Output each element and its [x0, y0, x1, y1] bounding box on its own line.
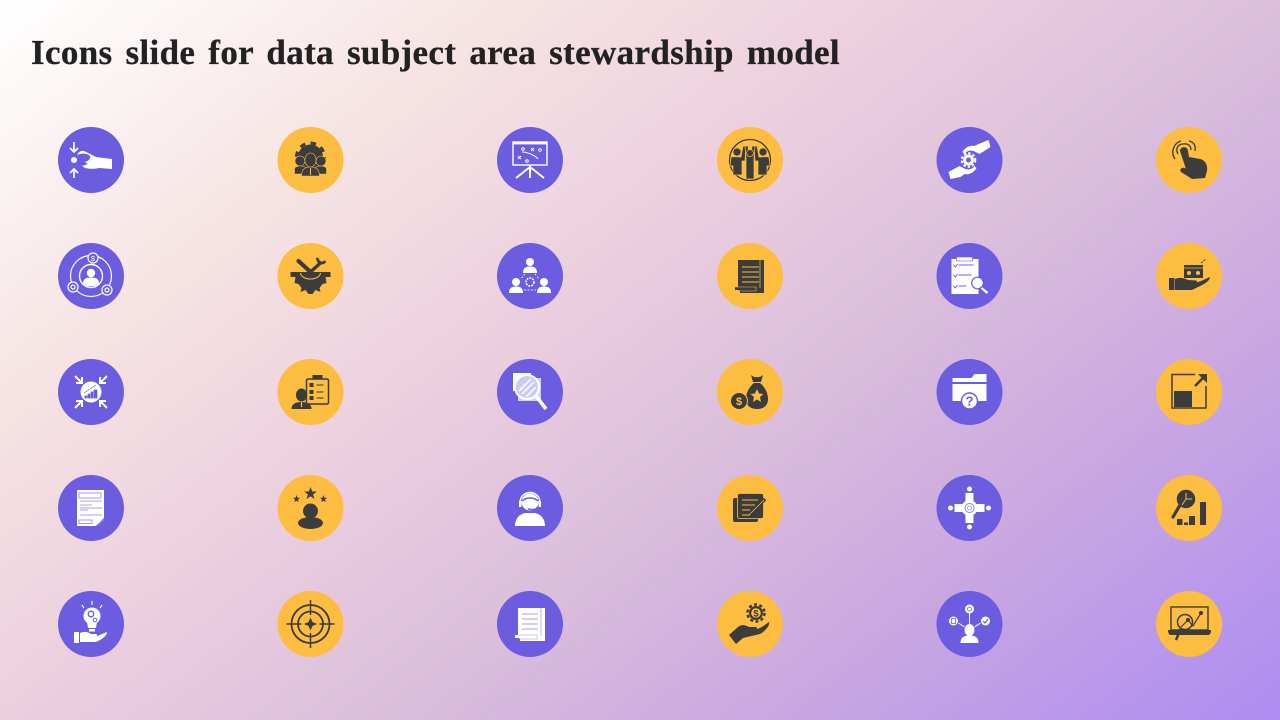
icon: hand holding dollar gear: $ — [753, 608, 759, 620]
icon: magnifier over hatched square — [497, 359, 563, 425]
icon: hand holding dollar gear — [717, 591, 783, 657]
icon: folder with question mark: ? — [966, 394, 974, 408]
icon: tools on half gear — [278, 243, 344, 309]
icon: three people around gear — [497, 243, 563, 309]
icon: dark scroll document — [717, 243, 783, 309]
icon: user in cycle of finance nodes — [58, 243, 124, 309]
icon: support agent with headset — [497, 475, 563, 541]
icon: target crosshair — [278, 591, 344, 657]
icon: person connected to three nodes — [936, 591, 1002, 657]
icon: businessman with checklist — [278, 359, 344, 425]
icon: money bag with coin: $ — [736, 396, 742, 408]
icon: finger tapping — [1156, 127, 1222, 193]
icon: money bag with coin — [717, 359, 783, 425]
icon: four people around table — [936, 475, 1002, 541]
icon: hand pinching with arrows — [58, 127, 124, 193]
icon: resize square with arrow — [1156, 359, 1222, 425]
icon: magnifier with pie and bar chart — [1156, 475, 1222, 541]
icon: person with three stars — [278, 475, 344, 541]
icon grid — [58, 127, 1222, 657]
icon: group celebrating in circle — [717, 127, 783, 193]
icon: white scroll document — [497, 591, 563, 657]
icon: laptop with analytics magnifier — [1156, 591, 1222, 657]
icon: user in cycle of finance nodes: $ — [91, 254, 96, 263]
icon: notes with pencil — [717, 475, 783, 541]
icon: strategy presentation board — [497, 127, 563, 193]
icon: folder with question mark — [936, 359, 1002, 425]
icon: hand holding cash — [1156, 243, 1222, 309]
icon: checklist with magnifier — [936, 243, 1002, 309]
icon: document page — [58, 475, 124, 541]
icon: arrows converging on growth chart — [58, 359, 124, 425]
icon: idea bulb on open hand — [58, 591, 124, 657]
title: Icons slide for data subject area stewardship model — [31, 33, 840, 72]
icon: team inside gear — [278, 127, 344, 193]
icon: two hands holding gear — [936, 127, 1002, 193]
